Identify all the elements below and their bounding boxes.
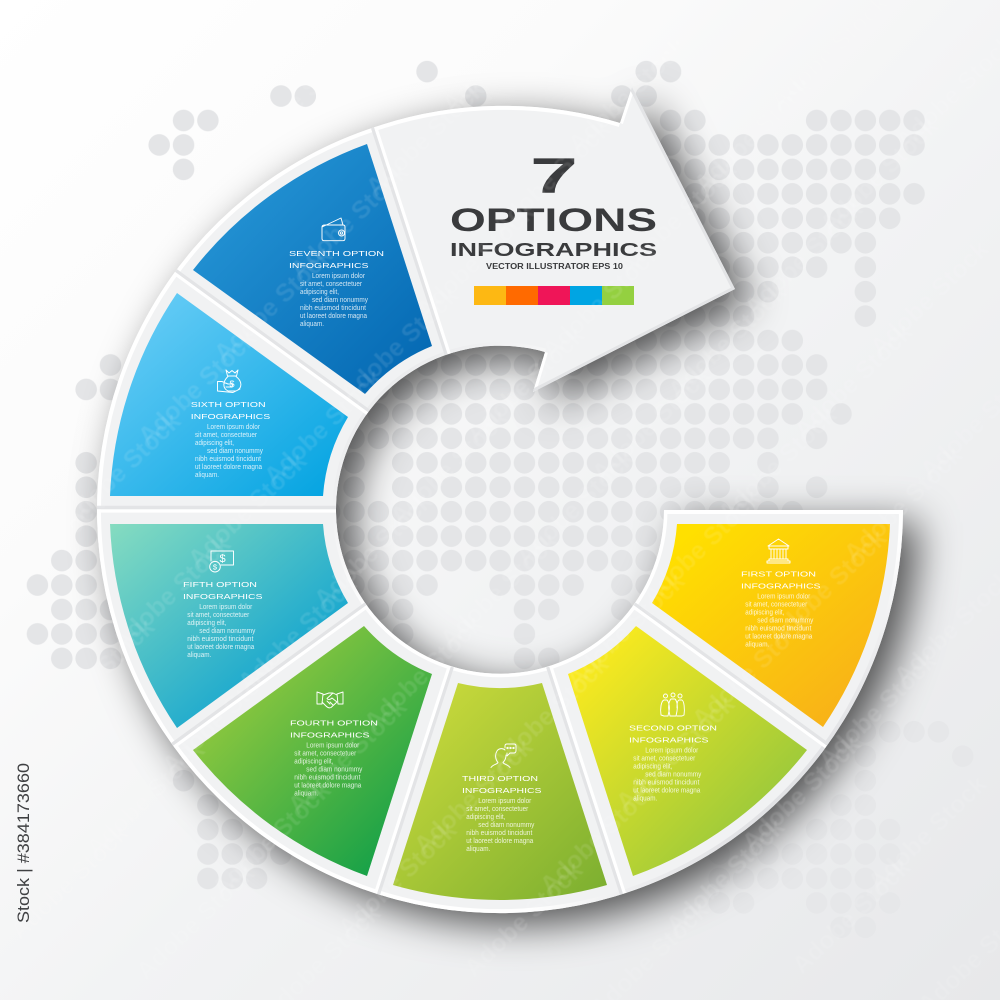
text: sixth option: Lorem ipsum dolor [207, 424, 261, 431]
text: fifth option: aliquam. [187, 652, 211, 659]
icon: banknote and coin: $ [213, 562, 218, 572]
watermarks: Adobe Stock [661, 813, 790, 939]
watermarks: Adobe Stock [107, 530, 236, 656]
watermarks: Adobe Stock [411, 198, 540, 324]
text: second option: ut laoreet dolore magna [633, 788, 700, 795]
watermarks: Adobe Stock [81, 736, 210, 862]
subtitle: VECTOR ILLUSTRATOR EPS 10 [486, 262, 624, 271]
text: second option [629, 724, 717, 803]
text: fifth option: FIFTH OPTION [183, 580, 257, 589]
watermarks: Adobe Stock [487, 115, 616, 241]
watermarks: Adobe Stock [285, 158, 414, 284]
watermarks: Adobe Stock [359, 610, 488, 736]
text: first option: aliquam. [745, 642, 769, 649]
text: first option: nibh euismod tincidunt [745, 626, 811, 633]
watermarks: Adobe Stock [687, 607, 816, 733]
text: fourth option: nibh euismod tincidunt [294, 775, 360, 782]
watermarks: Adobe Stock [259, 364, 388, 490]
watermarks: Adobe Stock [309, 487, 438, 613]
text: fourth option: sed diam nonummy [306, 767, 363, 774]
watermarks: Adobe Stock [233, 570, 362, 696]
icon: banknote and coin: $ [219, 553, 226, 565]
watermarks: Adobe Stock [157, 653, 286, 779]
icon: three people [661, 693, 684, 716]
watermarks: Adobe Stock [815, 112, 944, 238]
text: third option: sed diam nonummy [478, 822, 535, 829]
colour bar [474, 286, 634, 305]
text: sixth option: sit amet, consectetuer [195, 432, 258, 439]
dividers [97, 128, 828, 894]
text: third option: Lorem ipsum dolor [478, 798, 532, 805]
text: third option: aliquam. [466, 846, 490, 853]
text: sixth option: nibh euismod tincidunt [195, 456, 261, 463]
text: second option: SECOND OPTION [629, 724, 717, 732]
watermarks: Adobe Stock [789, 318, 918, 444]
watermarks: Adobe Stock [713, 401, 842, 527]
text: fourth option: aliquam. [294, 791, 318, 798]
text: sixth option: aliquam. [195, 472, 219, 479]
text: third option: THIRD OPTION [462, 774, 538, 783]
watermarks: Adobe Stock [563, 32, 692, 158]
panel: seventh option [193, 144, 432, 394]
watermarks: Adobe Stock [235, 35, 364, 161]
text: second option: nibh euismod tincidunt [633, 780, 699, 787]
text: seventh option: INFOGRAPHICS [289, 261, 368, 270]
watermarks: Adobe Stock [133, 324, 262, 450]
text: second option: INFOGRAPHICS [629, 736, 708, 744]
watermarks: Adobe Stock [335, 281, 464, 407]
watermarks: Adobe Stock [511, 444, 640, 570]
title OPTIONS: OPTIONS [450, 202, 657, 238]
drop shadow of arrow ring [112, 99, 918, 925]
text: fifth option: Lorem ipsum dolor [199, 604, 253, 611]
watermarks: Adobe Stock [159, 118, 288, 244]
text: first option: Lorem ipsum dolor [757, 594, 811, 601]
text: first option: FIRST OPTION [741, 570, 816, 578]
text: first option: sed diam nonummy [757, 618, 814, 625]
watermarks: Adobe Stock [587, 361, 716, 487]
watermarks: Adobe Stock [537, 238, 666, 364]
watermarks: Adobe Stock [663, 278, 792, 404]
text: first option [741, 570, 820, 649]
text: seventh option: aliquam. [300, 321, 324, 328]
watermarks: Adobe Stock [33, 78, 162, 204]
icon: money bag [218, 370, 241, 392]
text: fifth option: sed diam nonummy [199, 628, 256, 635]
arrow ring [97, 87, 903, 913]
icon: money bag: $ [229, 379, 235, 389]
text: fifth option: adipiscing elit, [187, 620, 226, 627]
watermarks: Adobe Stock [739, 195, 868, 321]
title number 7: 7 [530, 148, 578, 204]
panel: fourth option [193, 626, 432, 876]
text: second option: aliquam. [633, 796, 657, 803]
text: second option: sed diam nonummy [645, 772, 702, 779]
text: fifth option [183, 580, 262, 659]
watermarks: Adobe Stock [31, 613, 160, 739]
text: sixth option: adipiscing elit, [195, 440, 234, 447]
watermarks: Adobe Stock [333, 816, 462, 942]
watermarks: Adobe Stock [689, 72, 818, 198]
text: fifth option: sit amet, consectetuer [187, 612, 250, 619]
stock number label: Stock | #384173660 [14, 763, 33, 923]
text: seventh option: ut laoreet dolore magna [300, 313, 367, 320]
text: sixth option [191, 400, 270, 479]
watermarks: Adobe Stock [763, 524, 892, 650]
text: sixth option: sed diam nonummy [207, 448, 263, 455]
watermarks: Adobe Stock [361, 75, 490, 201]
text: sixth option: ut laoreet dolore magna [195, 464, 262, 471]
text: fourth option: ut laoreet dolore magna [294, 783, 361, 790]
watermarks: Adobe Stock [7, 284, 136, 410]
watermarks: Adobe Stock [435, 527, 564, 653]
text: seventh option: sed diam nonummy [312, 297, 368, 304]
icon: handshake [317, 692, 343, 708]
watermarks: Adobe Stock [839, 441, 968, 567]
watermarks: Adobe Stock [459, 856, 588, 982]
text: fourth option: Lorem ipsum dolor [306, 743, 360, 750]
panel: second option [568, 626, 807, 876]
watermarks: Adobe Stock [207, 776, 336, 902]
text: seventh option [289, 249, 384, 328]
watermarks: Adobe Stock [637, 484, 766, 610]
panel: fifth option [110, 524, 348, 728]
watermarks: Adobe Stock [209, 241, 338, 367]
watermarks: Adobe Stock [83, 201, 212, 327]
watermarks: Adobe Stock [737, 730, 866, 856]
text: third option: ut laoreet dolore magna [466, 838, 533, 845]
watermarks: Adobe Stock [385, 404, 514, 530]
icon: banknote and coin [210, 551, 234, 572]
text: third option: INFOGRAPHICS [462, 786, 542, 795]
text: second option: adipiscing elit, [633, 764, 672, 771]
panel: sixth option [110, 293, 348, 496]
watermarks: Adobe Stock [535, 773, 664, 899]
text: seventh option: adipiscing elit, [300, 289, 339, 296]
watermarks: Adobe Stock [131, 859, 260, 985]
text: second option: sit amet, consectetuer [633, 756, 696, 763]
text: first option: INFOGRAPHICS [741, 582, 820, 590]
watermarks: Adobe Stock [461, 321, 590, 447]
watermarks: Adobe Stock [409, 733, 538, 859]
text: fourth option: FOURTH OPTION [290, 718, 378, 728]
watermarks: Adobe Stock [183, 447, 312, 573]
watermarks: Adobe Stock [485, 650, 614, 776]
watermarks: Adobe Stock [57, 407, 186, 533]
text: fourth option: adipiscing elit, [294, 759, 333, 766]
watermarks: Adobe Stock [863, 770, 992, 896]
text: seventh option: sit amet, consectetuer [300, 281, 363, 288]
text: third option [462, 774, 542, 853]
watermarks: Adobe Stock [613, 155, 742, 281]
text: first option: sit amet, consectetuer [745, 602, 808, 609]
text: seventh option: Lorem ipsum dolor [312, 273, 366, 280]
watermarks: Adobe Stock [561, 567, 690, 693]
title INFOGRAPHICS: INFOGRAPHICS [450, 240, 657, 260]
watermarks: Adobe Stock [283, 693, 412, 819]
text: seventh option: nibh euismod tincidunt [300, 305, 366, 312]
icon: person with speech bubble [491, 744, 516, 768]
text: sixth option: INFOGRAPHICS [191, 412, 270, 421]
text: seventh option: SEVENTH OPTION [289, 249, 384, 258]
watermarks: Adobe Stock [611, 690, 740, 816]
text: third option: sit amet, consectetuer [466, 806, 529, 813]
text: fifth option: nibh euismod tincidunt [187, 636, 253, 643]
text: sixth option: SIXTH OPTION [191, 400, 266, 409]
text: third option: nibh euismod tincidunt [466, 830, 532, 837]
text: fourth option: sit amet, consectetuer [294, 751, 357, 758]
text: fifth option: ut laoreet dolore magna [187, 644, 254, 651]
watermarks: Adobe Stock [5, 819, 134, 945]
watermarks: Adobe Stock [813, 647, 942, 773]
text: fourth option [290, 718, 378, 798]
text: fifth option: INFOGRAPHICS [183, 592, 262, 601]
text: second option: Lorem ipsum dolor [645, 748, 699, 755]
watermarks: Adobe Stock [865, 235, 994, 361]
panel: first option [652, 524, 890, 727]
icon: wallet [322, 218, 345, 241]
text: fourth option: INFOGRAPHICS [290, 730, 370, 740]
text: first option: adipiscing elit, [745, 610, 784, 617]
text: third option: adipiscing elit, [466, 814, 505, 821]
watermarks: Adobe Stock [787, 853, 916, 979]
panel: third option [393, 683, 607, 900]
heading block [450, 148, 657, 271]
text: first option: ut laoreet dolore magna [745, 634, 812, 641]
icon: bank building [767, 539, 790, 563]
